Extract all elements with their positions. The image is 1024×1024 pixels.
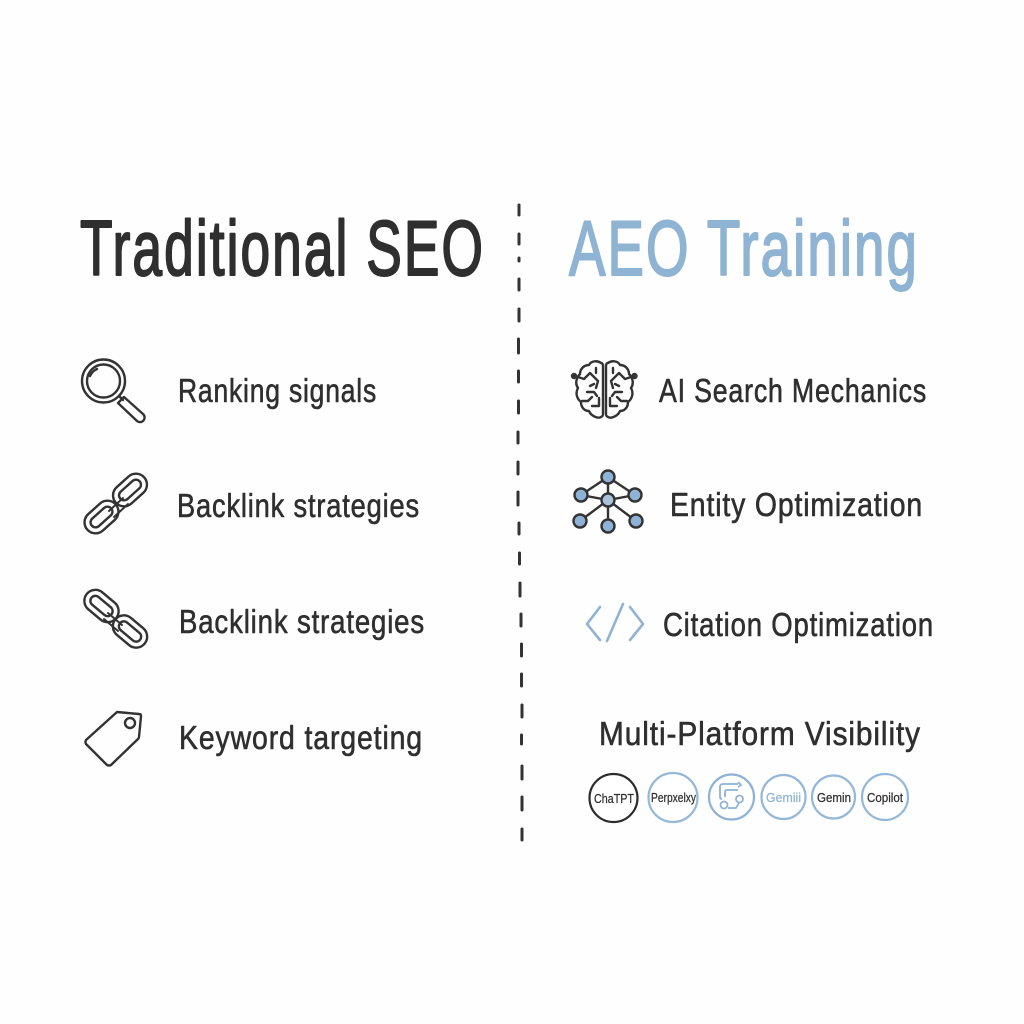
platform badge: Copilot: Copilot xyxy=(867,790,903,805)
icon: price tag xyxy=(86,712,141,766)
icon: magnifying glass xyxy=(82,360,145,422)
platform badge: icon xyxy=(709,774,754,820)
icon: chain link, mirrored xyxy=(80,585,152,652)
platform badge: ChatGPT xyxy=(590,774,638,822)
platform badge: Gemini, blue: Gemiii xyxy=(766,790,801,805)
center dashed divider xyxy=(518,205,522,840)
icon: entity network xyxy=(574,470,642,532)
label: Multi-Platform Visibility: Multi-Platform Visibility xyxy=(599,715,921,752)
label: Citation Optimization: Citation Optimization xyxy=(663,606,934,643)
label: Backlink strategies (second): Backlink strategies xyxy=(179,603,425,640)
platform badge: Gemini, blue xyxy=(762,775,806,819)
platform badge: Perplexity xyxy=(648,773,698,822)
icon: brain xyxy=(572,361,636,418)
platform badge: Gemini, dark xyxy=(812,776,855,818)
icon: chain link xyxy=(80,469,151,538)
platform badge: Perplexity: Perpxelxy xyxy=(651,790,696,805)
platform badge: Gemini, dark: Gemin xyxy=(817,790,851,805)
platform badge: ChatGPT: ChaTPT xyxy=(594,791,634,806)
icon: code brackets xyxy=(587,604,643,641)
label: AI Search Mechanics: AI Search Mechanics xyxy=(659,372,927,409)
platform badge: Copilot xyxy=(862,774,908,820)
label: Keyword targeting: Keyword targeting xyxy=(179,719,423,756)
label: Entity Optimization: Entity Optimization xyxy=(670,486,923,523)
title: Traditional SEO: Traditional SEO xyxy=(80,204,485,292)
label: Ranking signals: Ranking signals xyxy=(178,372,377,409)
label: Backlink strategies: Backlink strategies xyxy=(177,487,420,524)
